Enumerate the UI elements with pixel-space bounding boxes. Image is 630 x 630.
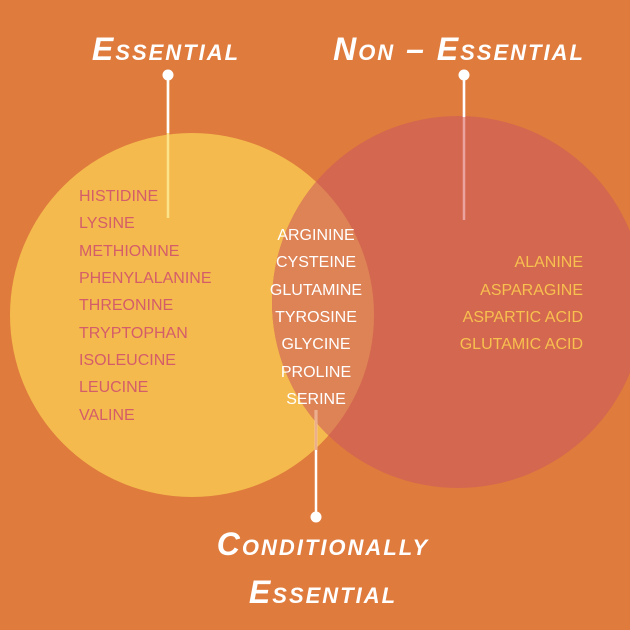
list: non-essential: ALANINE — [515, 254, 583, 271]
list: essential amino acids — [79, 188, 212, 424]
pointer: essential — [162, 70, 174, 218]
title: non-essential: Non – Essential — [333, 31, 585, 67]
list: essential amino acids: METHIONINE — [79, 243, 179, 260]
list: non-essential: GLUTAMIC ACID — [460, 336, 583, 353]
list: essential amino acids: THREONINE — [79, 297, 173, 314]
list: conditionally essential: ARGININE — [277, 227, 355, 244]
list: essential amino acids: VALINE — [79, 407, 135, 424]
title: conditionally essential: Essential — [249, 574, 397, 610]
list: essential amino acids: TRYPTOPHAN — [79, 325, 188, 342]
list: essential amino acids: ISOLEUCINE — [79, 352, 176, 369]
list: essential amino acids: PHENYLALANINE — [79, 270, 212, 287]
overlap region — [272, 182, 374, 435]
list: essential amino acids: HISTIDINE — [79, 188, 158, 205]
circle: non-essential — [272, 116, 630, 488]
list: essential amino acids: LYSINE — [79, 215, 135, 232]
pointer: non-essential — [458, 70, 470, 220]
pointer: conditionally essential — [310, 410, 322, 522]
list: conditionally essential: TYROSINE — [275, 309, 357, 326]
list: conditionally essential: GLYCINE — [281, 336, 351, 353]
list: conditionally essential: GLUTAMINE — [270, 282, 362, 299]
list: essential amino acids: LEUCINE — [79, 379, 148, 396]
title: conditionally essential: Conditionally — [217, 526, 430, 562]
title: conditionally essential — [217, 526, 430, 610]
circle: essential — [10, 133, 374, 497]
list: conditionally essential: SERINE — [286, 391, 346, 408]
list: conditionally essential — [270, 227, 362, 408]
list: non-essential — [460, 254, 583, 353]
list: non-essential: ASPARTIC ACID — [463, 309, 583, 326]
list: non-essential: ASPARAGINE — [480, 282, 583, 299]
list: conditionally essential: PROLINE — [281, 364, 351, 381]
list: conditionally essential: CYSTEINE — [276, 254, 356, 271]
title: essential: Essential — [92, 31, 240, 67]
